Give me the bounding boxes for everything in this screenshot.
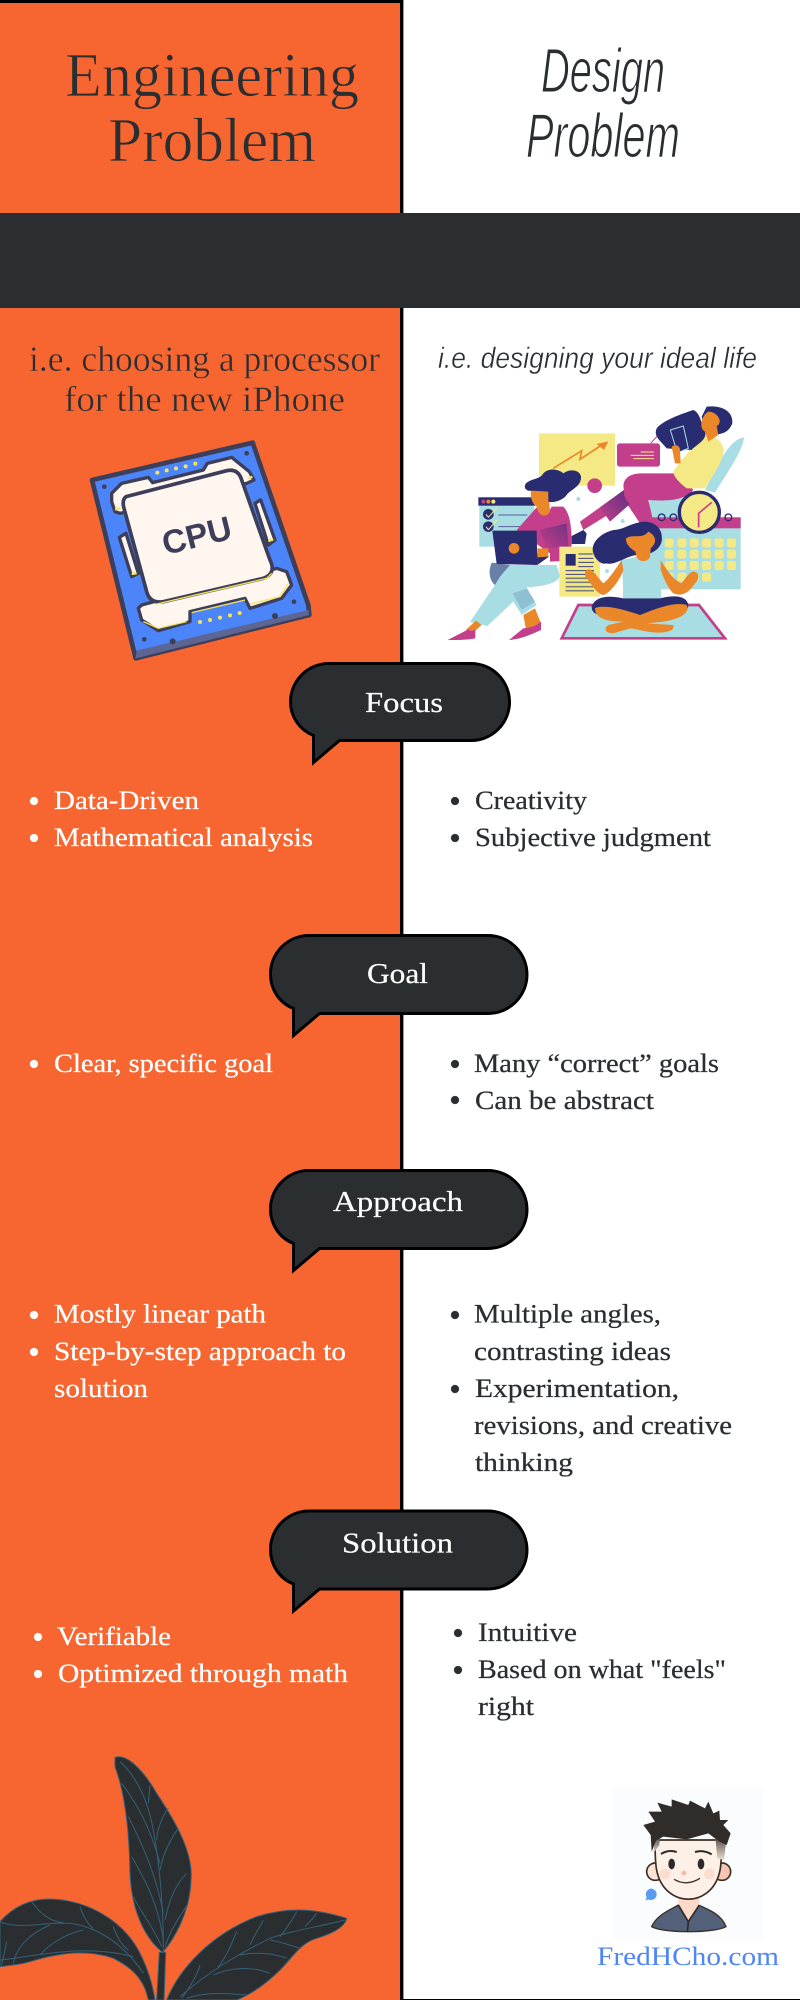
subheading: engineering example — [29, 339, 380, 419]
heading: Engineering Problem: Engineering — [65, 42, 359, 110]
list: engineering solution — [34, 1622, 348, 1688]
list: design goal: Can be abstract — [475, 1086, 655, 1115]
list: engineering goal: Clear, specific goal — [54, 1049, 273, 1078]
callout: Solution — [270, 1511, 527, 1611]
callout: Goal: Goal — [367, 958, 428, 990]
heading: Engineering Problem: Problem — [108, 107, 316, 175]
list: design approach: thinking — [475, 1448, 573, 1477]
dark band — [0, 213, 800, 308]
top edge line — [0, 0, 403, 3]
illustration: leaves — [0, 1757, 347, 2000]
callout: Goal — [270, 936, 527, 1036]
list: engineering focus — [30, 786, 313, 852]
list: engineering approach: Step-by-step approach to — [54, 1337, 346, 1366]
heading: Design Problem — [526, 37, 680, 171]
heading: Design Problem: Problem — [526, 102, 680, 171]
list: engineering focus: Mathematical analysis — [54, 823, 313, 852]
list: design goal: Many “correct” goals — [474, 1049, 719, 1078]
heading: Design Problem: Design — [541, 37, 665, 106]
illustration: avatar portrait — [612, 1788, 763, 1940]
brand link text: FredHCho.com — [597, 1942, 779, 1971]
list: design approach — [451, 1300, 732, 1477]
list: design solution: Based on what "feels" — [478, 1655, 726, 1684]
list: engineering approach — [30, 1300, 346, 1403]
panel: engineering column background — [0, 3, 400, 2000]
list: design focus — [451, 786, 712, 852]
callout: Focus: Focus — [365, 687, 443, 719]
subheading: design example: i.e. designing your ideal life — [438, 342, 757, 375]
callout: Focus — [290, 664, 510, 762]
list: design solution: right — [478, 1692, 535, 1721]
illustration: three women planning their life — [448, 406, 744, 640]
callout: Approach: Approach — [333, 1186, 464, 1218]
list: engineering solution: Optimized through math — [58, 1659, 348, 1688]
callout: Solution: Solution — [342, 1528, 454, 1560]
list: engineering focus: Data-Driven — [54, 786, 199, 815]
list: design focus: Creativity — [475, 786, 587, 815]
icon: CPU chip: CPU — [158, 510, 236, 563]
subheading: engineering example: for the new iPhone — [64, 379, 345, 419]
list: engineering approach: Mostly linear path — [54, 1300, 266, 1328]
list: design goal — [451, 1049, 719, 1115]
heading: Engineering Problem — [65, 42, 359, 175]
callout: Approach — [270, 1170, 527, 1270]
list: design approach: Multiple angles, — [474, 1300, 661, 1328]
centre divider — [400, 0, 403, 2000]
icon: CPU chip — [92, 443, 309, 658]
subheading: engineering example: i.e. choosing a processor — [29, 339, 380, 379]
list: engineering approach: solution — [54, 1374, 148, 1403]
list: design solution — [454, 1618, 726, 1721]
bottom edge line — [403, 1999, 800, 2000]
list: design approach: revisions, and creative — [474, 1411, 732, 1440]
list: design approach: Experimentation, — [475, 1374, 679, 1403]
list: design focus: Subjective judgment — [475, 823, 712, 852]
list: design approach: contrasting ideas — [474, 1337, 671, 1366]
list: design solution: Intuitive — [478, 1618, 577, 1647]
list: engineering solution: Verifiable — [57, 1622, 171, 1651]
